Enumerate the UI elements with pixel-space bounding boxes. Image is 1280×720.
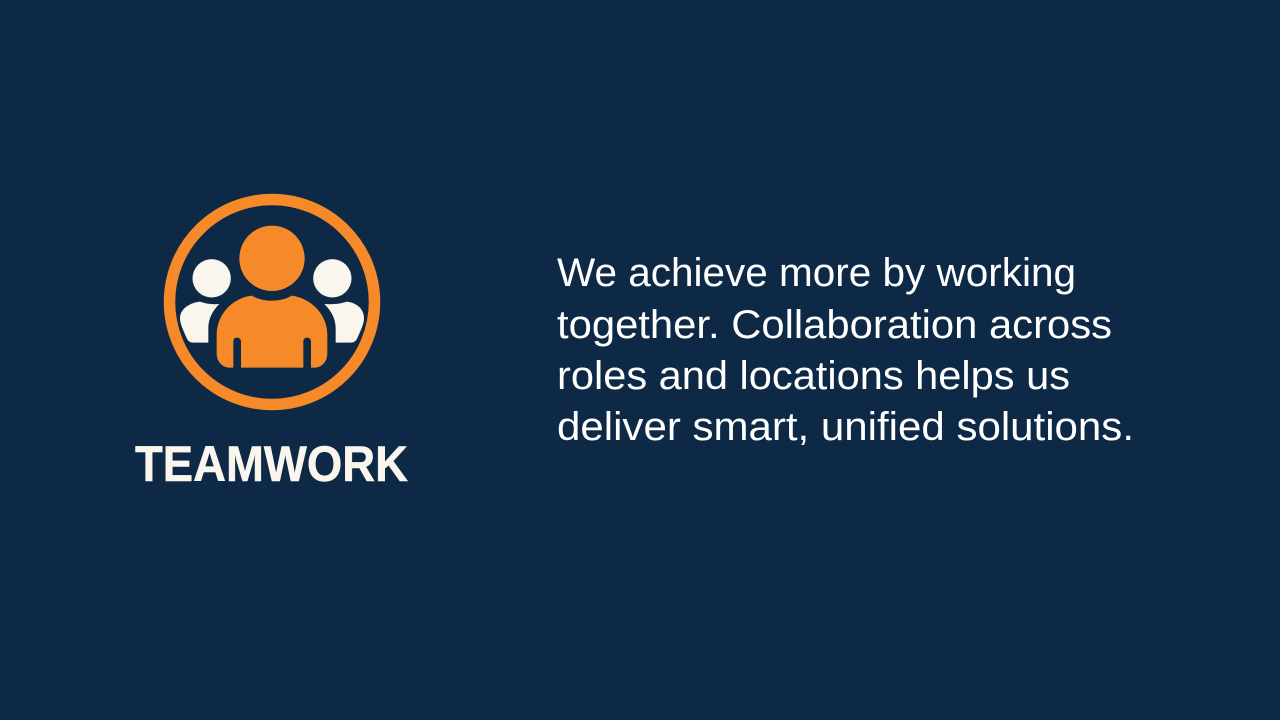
icon: right team member: [313, 259, 364, 343]
line 3: roles and locations helps us: [557, 354, 1070, 398]
icon label: TEAMWORK: TEAMWORK: [135, 436, 408, 492]
line 1: We achieve more by working: [557, 251, 1076, 295]
icon: centre team member: [217, 226, 327, 368]
icon ring: [170, 200, 374, 404]
icon: teamwork badge: [170, 200, 374, 404]
line 4: deliver smart, unified solutions.: [557, 405, 1134, 449]
line 2: together. Collaboration across: [557, 303, 1112, 347]
icon: left team member: [180, 259, 231, 343]
description text block: [557, 251, 1134, 449]
